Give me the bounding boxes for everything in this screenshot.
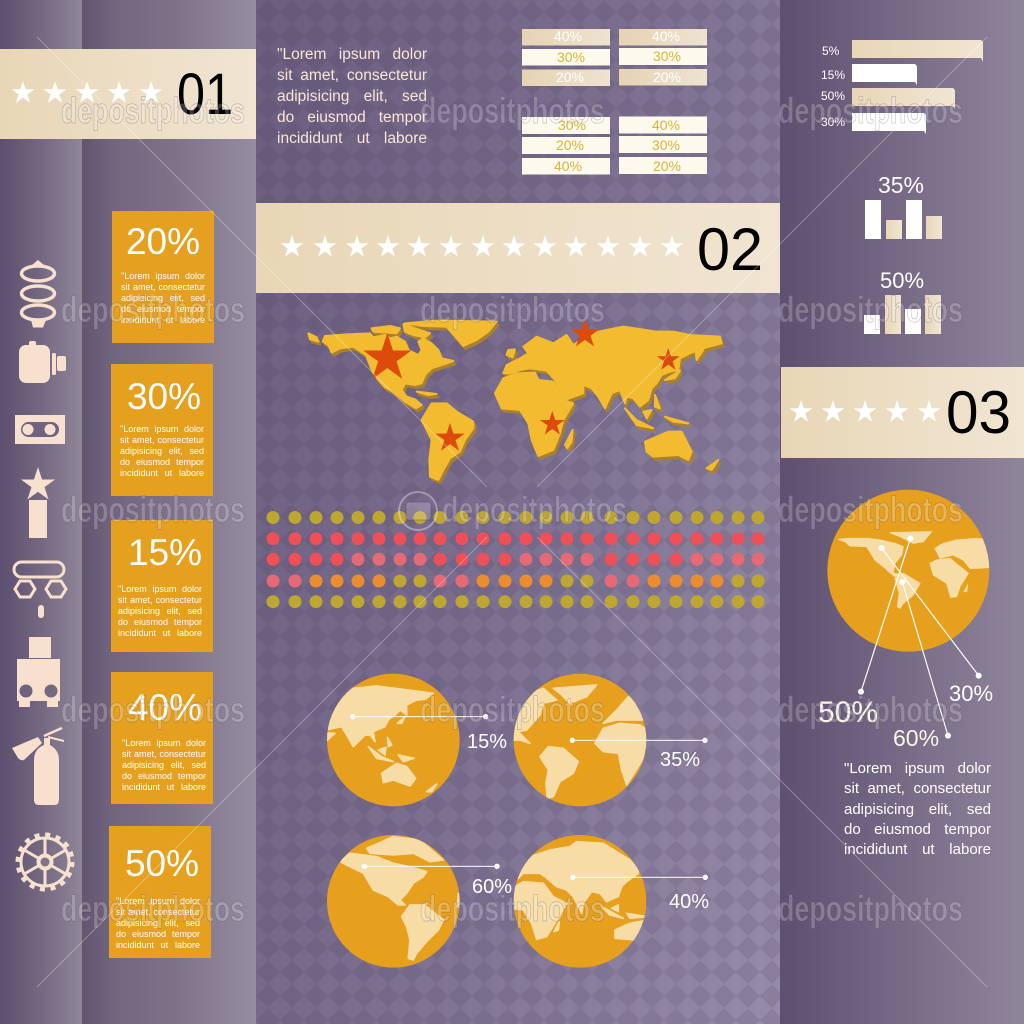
panel: 15%: "Lorem ipsum dolor [118, 584, 202, 594]
watermark overlay: depositphotos [778, 289, 963, 330]
watermark overlay: depositphotos [420, 289, 605, 330]
percentage table: 20% [653, 158, 681, 174]
globe: Asia 15% [323, 674, 488, 806]
watermark overlay: depositphotos [778, 888, 963, 929]
panel: 15%: sit amet, consectetur [118, 595, 202, 605]
icon: pill and hexagons [14, 562, 66, 618]
banner 02 stars [281, 235, 683, 257]
panel: 50%: adipisicing elit, sed [116, 918, 200, 928]
panel: 50%: do eiusmod tempor [116, 929, 200, 939]
watermark overlay: depositphotos [420, 689, 605, 730]
percentage table [522, 28, 707, 174]
icon: fire extinguisher [12, 728, 64, 805]
percentage table: 30% [653, 48, 681, 64]
section 03 text: incididunt ut labore [844, 841, 991, 858]
intro text: sit amet, consectetur [277, 67, 427, 84]
panel: 30%: sit amet, consectetur [120, 435, 204, 445]
column chart 50% [864, 268, 941, 334]
watermark overlay: depositphotos [778, 90, 963, 131]
watermark overlay: depositphotos [61, 689, 245, 730]
callout line [350, 714, 488, 719]
horizontal bar chart [821, 40, 983, 134]
panel: 50% [109, 826, 211, 958]
callout line [362, 864, 500, 869]
panel: 20%: "Lorem ipsum dolor [121, 270, 205, 280]
horizontal bar chart: 30% [821, 115, 845, 129]
map stars [363, 319, 680, 451]
panel: 20%: sit amet, consectetur [121, 282, 205, 292]
panel: 15%: incididunt ut labore [118, 628, 202, 638]
section 03 globe labels [818, 681, 993, 751]
percentage table: 40% [652, 28, 680, 44]
column chart 35%: 35% [878, 172, 924, 198]
icon: bottle and cap [19, 341, 66, 383]
percentage table: 30% [652, 137, 680, 153]
icon: machine [17, 637, 60, 707]
background: centre column [256, 0, 780, 1024]
panel: 20%: 20% [126, 221, 200, 262]
horizontal bar chart: 15% [821, 68, 845, 82]
intro text: incididunt ut labore [277, 130, 427, 147]
panel: 15%: adipisicing elit, sed [118, 606, 202, 616]
icon: gear [18, 835, 72, 889]
percentage table: 20% [556, 137, 584, 153]
background: left column [82, 0, 256, 1024]
section 03 text: "Lorem ipsum dolor [844, 760, 991, 777]
globe: Americas 60% [327, 835, 500, 968]
panel: 50%: sit amet, consectetur [116, 907, 200, 917]
watermark overlay: depositphotos [61, 888, 245, 929]
icon: stacked rings [22, 260, 54, 328]
panel: 20%: adipisicing elit, sed [121, 293, 205, 303]
panel: 30%: incididunt ut labore [120, 468, 204, 478]
diamond pattern [256, 0, 780, 1024]
globe: Eurasia 40% [510, 835, 708, 968]
callout line [570, 875, 708, 880]
panel: 20%: do eiusmod tempor [121, 304, 205, 314]
panel: 50%: "Lorem ipsum dolor [116, 896, 200, 906]
banner 01 [0, 49, 256, 139]
world map [308, 319, 724, 483]
banner 02 [256, 203, 780, 293]
watermark overlay: depositphotos [442, 489, 627, 530]
percentage table: 20% [556, 69, 584, 85]
banner 03 [781, 367, 1024, 458]
section 03 globe labels: 50% [818, 696, 878, 729]
section 03 globe labels: 30% [949, 681, 993, 706]
panel: 20%: incididunt ut labore [121, 315, 205, 325]
watermark overlay: depositphotos [61, 489, 245, 530]
globe labels: 60% [472, 876, 512, 898]
panel: 20% [112, 211, 214, 343]
section 03 globe labels: 60% [893, 725, 939, 751]
globe labels: 35% [660, 749, 700, 771]
panel: 40%: incididunt ut labore [122, 782, 206, 792]
background: left strip [0, 0, 82, 1024]
callout line [570, 738, 708, 743]
watermark overlay: depositphotos [778, 689, 963, 730]
panel: 40%: 40% [128, 687, 202, 728]
icon: star on column [21, 467, 55, 538]
globe: callout globe section 03 [827, 490, 992, 739]
watermark overlay: depositphotos [420, 888, 605, 929]
banner 01 number: 01 [177, 62, 233, 127]
intro text: "Lorem ipsum dolor [277, 46, 427, 63]
globe labels [467, 731, 709, 913]
watermark overlay: depositphotos [61, 90, 245, 131]
banner 03 stars [790, 400, 940, 422]
section 03 text: sit amet, consectetur [844, 780, 991, 797]
panel: 30%: adipisicing elit, sed [120, 446, 204, 456]
panel: 40%: sit amet, consectetur [122, 749, 206, 759]
horizontal bar chart: 5% [822, 44, 840, 58]
horizontal bar chart: 50% [821, 89, 845, 103]
banner 03 number: 03 [946, 379, 1011, 446]
panel: 50%: 50% [125, 843, 199, 884]
panel: 15%: do eiusmod tempor [118, 617, 202, 627]
banner 02 number: 02 [697, 216, 763, 283]
callout lines [858, 536, 982, 739]
percentage table: 40% [652, 117, 680, 133]
column chart 35% [865, 172, 942, 239]
column chart 50%: 50% [880, 268, 924, 293]
watermark overlay: depositphotos [61, 289, 245, 330]
panel: 40%: do eiusmod tempor [122, 771, 206, 781]
panel: 30%: do eiusmod tempor [120, 457, 204, 467]
percentage table: 30% [557, 49, 585, 65]
globe: Atlantic 35% [510, 674, 708, 806]
panel: 15% [111, 520, 213, 652]
panel: 40%: adipisicing elit, sed [122, 760, 206, 770]
percentage table: 30% [558, 117, 586, 133]
panel: 30%: 30% [127, 376, 201, 417]
percentage table: 40% [554, 158, 582, 174]
globe labels: 15% [467, 731, 507, 753]
watermark overlay: depositphotos [778, 489, 963, 530]
panel: 30% [111, 364, 213, 496]
section 03 text: do eiusmod tempor [844, 821, 991, 838]
percentage table: 20% [653, 69, 681, 85]
dot matrix [266, 511, 764, 608]
panel: 30%: "Lorem ipsum dolor [120, 424, 204, 434]
watermark overlay: depositphotos [420, 90, 605, 131]
panel: 40%: "Lorem ipsum dolor [122, 738, 206, 748]
section 03 text: adipisicing elit, sed [844, 801, 991, 818]
section 03 text [844, 760, 991, 858]
panel: 50%: incididunt ut labore [116, 940, 200, 950]
intro text [277, 46, 427, 147]
background: right column [780, 0, 1024, 1024]
globe labels: 40% [669, 891, 709, 913]
intro text: adipisicing elit, sed [277, 88, 427, 105]
panel: 15%: 15% [128, 532, 202, 573]
intro text: do eiusmod tempor [277, 109, 427, 126]
banner 01 stars [12, 81, 162, 103]
icon: tape [15, 415, 65, 444]
percentage table: 40% [554, 28, 582, 44]
panel: 40% [111, 672, 213, 804]
